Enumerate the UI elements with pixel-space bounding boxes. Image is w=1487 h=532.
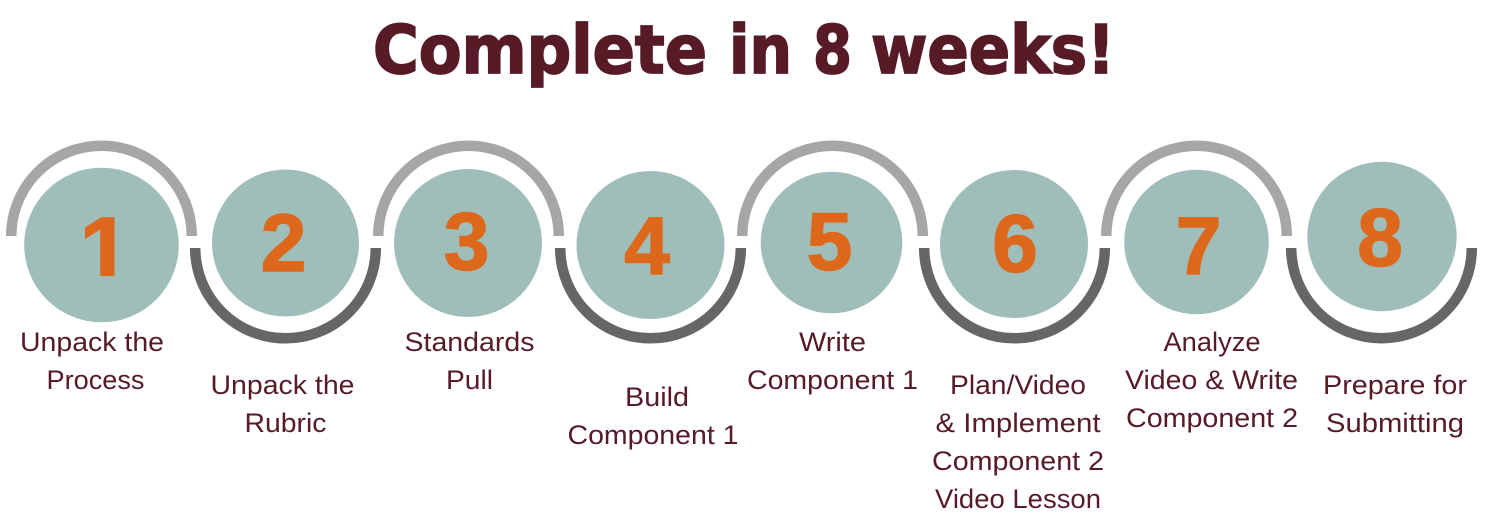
arc 5 bbox=[742, 146, 923, 236]
label 7: Video & Write bbox=[1125, 365, 1298, 395]
circle 7 bbox=[1124, 170, 1269, 314]
step 1 bbox=[11, 146, 192, 395]
number 7: 7 bbox=[1176, 201, 1221, 292]
circle 4 bbox=[576, 171, 724, 319]
label 1: Unpack the bbox=[20, 327, 164, 357]
label 5: Write bbox=[799, 327, 866, 357]
label 4: Build bbox=[625, 382, 689, 412]
label 8: Submitting bbox=[1326, 408, 1464, 438]
step 5 bbox=[742, 146, 923, 395]
arc 4 bbox=[560, 248, 741, 338]
number 2: 2 bbox=[261, 198, 306, 289]
step 3 bbox=[378, 146, 559, 395]
label 8: Prepare for bbox=[1323, 370, 1467, 400]
circle 6 bbox=[940, 170, 1088, 318]
step 7 bbox=[1106, 146, 1298, 433]
label 6: Component 2 bbox=[932, 446, 1104, 476]
number 1: 1 bbox=[76, 196, 134, 312]
label 4: Component 1 bbox=[568, 420, 738, 450]
label 3: Standards bbox=[404, 327, 534, 357]
arc 3 bbox=[378, 146, 559, 236]
step 4 bbox=[560, 171, 741, 450]
number 6: 6 bbox=[992, 198, 1038, 290]
label 3: Pull bbox=[446, 365, 493, 395]
title: weeks! bbox=[871, 11, 1115, 89]
title: Complete bbox=[373, 11, 707, 89]
label 7: Analyze bbox=[1164, 327, 1260, 357]
number 3: 3 bbox=[444, 196, 489, 288]
number 8: 8 bbox=[1357, 192, 1403, 284]
label 6: Plan/Video bbox=[950, 370, 1086, 400]
arc 2 bbox=[195, 248, 376, 338]
number 4: 4 bbox=[624, 201, 670, 292]
label 5: Component 1 bbox=[747, 365, 918, 395]
circle 3 bbox=[394, 169, 542, 317]
label 2: Unpack the bbox=[210, 370, 354, 400]
arc 1 bbox=[11, 146, 192, 236]
title: 8 bbox=[813, 11, 852, 89]
circle 8 bbox=[1307, 162, 1457, 311]
arc 7 bbox=[1106, 146, 1287, 236]
arc 6 bbox=[924, 248, 1105, 338]
label 6: Video Lesson bbox=[935, 484, 1101, 514]
circle 2 bbox=[212, 170, 359, 316]
label 2: Rubric bbox=[244, 408, 326, 438]
label 7: Component 2 bbox=[1126, 403, 1298, 433]
label 6: & Implement bbox=[936, 408, 1101, 438]
circle 1 bbox=[24, 168, 179, 322]
step 6 bbox=[924, 170, 1105, 514]
title: in bbox=[729, 11, 792, 89]
circle 5 bbox=[761, 172, 902, 313]
arc 8 bbox=[1291, 248, 1472, 338]
number 5: 5 bbox=[807, 196, 852, 288]
step 8 bbox=[1291, 162, 1472, 438]
label 1: Process bbox=[46, 365, 144, 395]
step 2 bbox=[195, 170, 376, 438]
